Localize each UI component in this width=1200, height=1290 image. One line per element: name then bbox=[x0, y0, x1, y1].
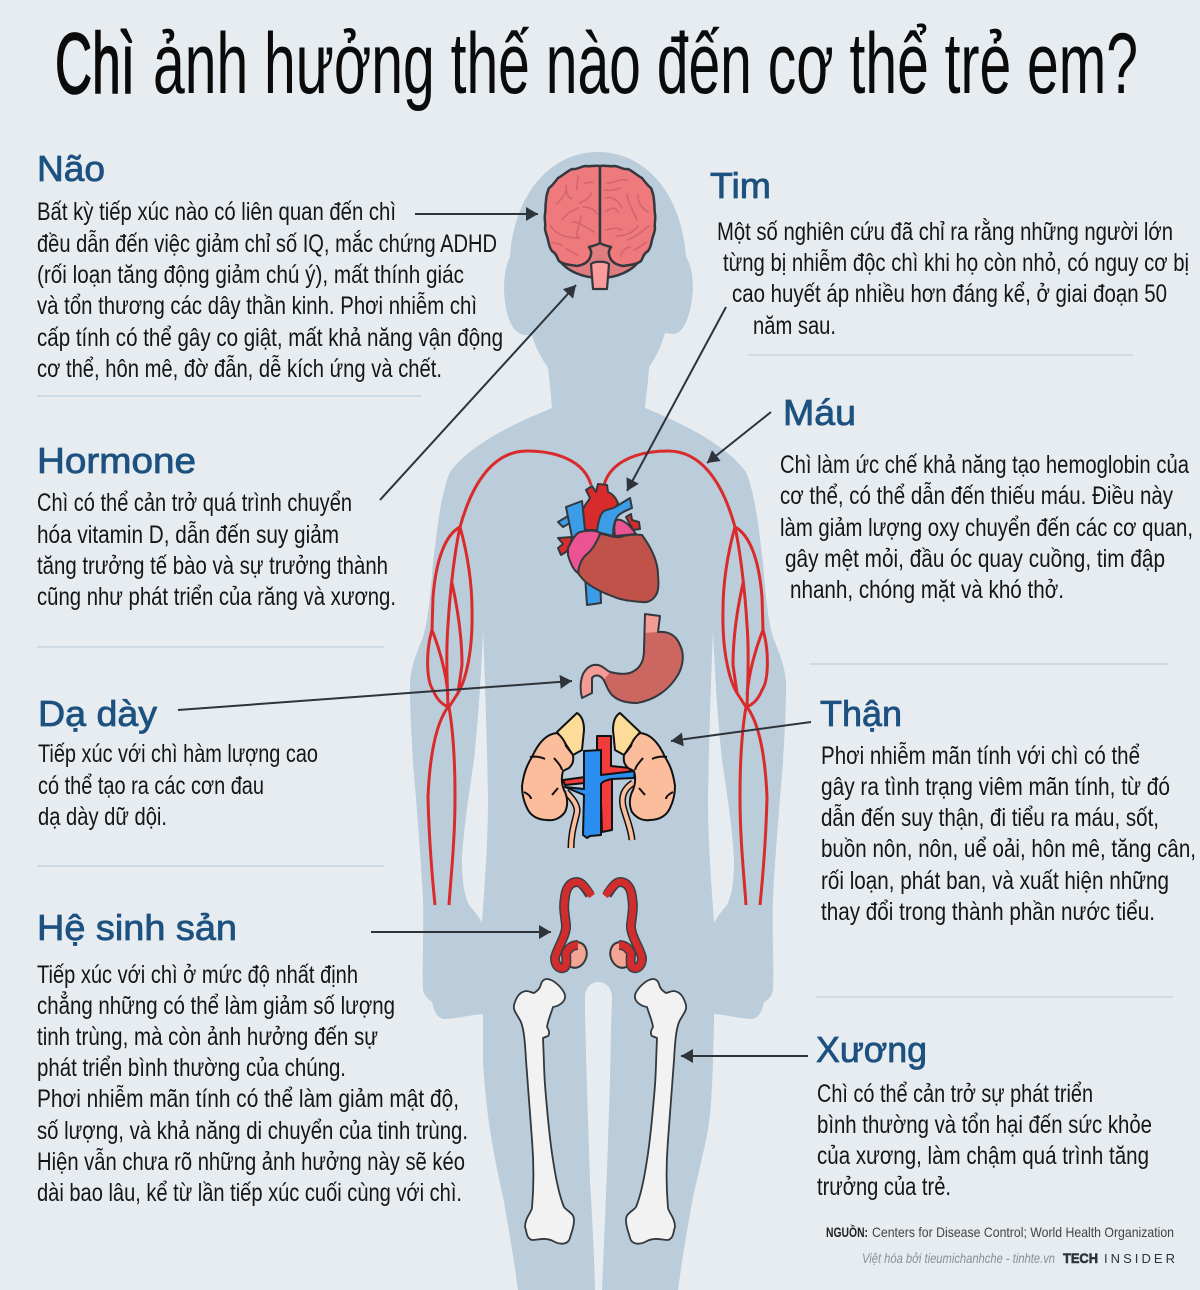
text block: Dạ dày: Tiếp xúc với chì hàm lượng cao bbox=[38, 740, 318, 768]
panel: Tim bbox=[710, 165, 1189, 340]
heading: Xương: Xương bbox=[816, 1029, 927, 1070]
text block: Hormone: tăng trưởng tế bào và sự trưởng thành bbox=[37, 552, 388, 580]
text block: Dạ dày: có thể tạo ra các cơn đau bbox=[38, 772, 264, 800]
heading: Não: Não bbox=[37, 148, 105, 189]
text block: Dạ dày bbox=[38, 740, 318, 831]
arrow: bones bbox=[681, 1055, 808, 1057]
text block: Dạ dày: dạ dày dữ dội. bbox=[38, 803, 167, 831]
heading: Hormone: Hormone bbox=[37, 440, 196, 481]
text block: Hệ sinh sản: Phơi nhiễm mãn tính có thể làm giảm mật độ, bbox=[37, 1084, 459, 1113]
text block: Não: (rối loạn tăng động giảm chú ý), mất thính giác bbox=[37, 261, 464, 289]
icon: stomach bbox=[581, 614, 683, 703]
text block: Hệ sinh sản bbox=[37, 961, 468, 1207]
panel: Thận bbox=[820, 693, 1196, 926]
icon: arteries bbox=[428, 451, 767, 905]
panel: Hormone bbox=[37, 440, 396, 611]
arrow: blood bbox=[707, 412, 771, 463]
text block: Thận bbox=[821, 741, 1196, 926]
icon: reproductive organs bbox=[555, 882, 642, 971]
text block: Hormone: cũng như phát triển của răng và xương. bbox=[37, 583, 396, 611]
panel: Xương bbox=[816, 1029, 1152, 1201]
icon: kidneys bbox=[522, 713, 675, 848]
text block: Hệ sinh sản: dài bao lâu, kể từ lần tiếp xúc cuối cùng với chì. bbox=[37, 1179, 462, 1207]
text block: Tim bbox=[717, 217, 1189, 340]
panel: Não bbox=[37, 148, 503, 383]
text block: Não: Bất kỳ tiếp xúc nào có liên quan đến chì bbox=[37, 198, 396, 226]
panel: Máu bbox=[780, 392, 1193, 604]
text block: Não: cấp tính có thể gây co giật, mất khả năng vận động bbox=[37, 324, 503, 352]
title: Chì bbox=[55, 16, 135, 112]
panel: Dạ dày bbox=[38, 693, 318, 831]
text block: Hệ sinh sản: số lượng, và khả năng di chuyển của tinh trùng. bbox=[37, 1117, 468, 1145]
text block: Não: cơ thể, hôn mê, đờ đẫn, dễ kích ứng và chết. bbox=[37, 354, 442, 383]
text block: Máu: nhanh, chóng mặt và khó thở. bbox=[790, 576, 1064, 604]
heading: Máu: Máu bbox=[783, 392, 856, 433]
arrow: heart bbox=[627, 307, 726, 491]
text block: Hệ sinh sản: tinh trùng, mà còn ảnh hưởng đến sự bbox=[37, 1023, 378, 1051]
text block: Não: và tổn thương các dây thần kinh. Phơi nhiễm chì bbox=[37, 291, 477, 320]
icon: brain bbox=[545, 166, 655, 289]
heading: Hệ sinh sản: Hệ sinh sản bbox=[37, 907, 237, 948]
arrow: brain bbox=[415, 213, 538, 215]
text block: Hệ sinh sản: chẳng những có thể làm giảm số lượng bbox=[37, 990, 395, 1020]
icon: left femur bbox=[514, 979, 574, 1244]
text block: Hệ sinh sản: Tiếp xúc với chì ở mức độ nhất định bbox=[37, 961, 358, 989]
logo: Tech Insider: INSIDER bbox=[1104, 1251, 1175, 1266]
text block: Thận: Phơi nhiễm mãn tính với chì có thể bbox=[821, 741, 1140, 770]
text block: Hormone: Chì có thể cản trở quá trình chuyển bbox=[37, 489, 352, 517]
text block: Hormone: hóa vitamin D, dẫn đến suy giảm bbox=[37, 520, 339, 549]
logo: Tech Insider: TECH bbox=[1063, 1250, 1098, 1266]
text block: Hệ sinh sản: phát triển bình thường của chúng. bbox=[37, 1054, 346, 1082]
text block: Não bbox=[37, 198, 503, 383]
logo: Tech Insider bbox=[1063, 1250, 1175, 1266]
source credit: NGUỒN: bbox=[826, 1223, 868, 1240]
icon: heart bbox=[558, 484, 658, 605]
body silhouette bbox=[410, 152, 786, 1290]
arrow: kidneys bbox=[671, 722, 811, 741]
icon: right femur bbox=[626, 979, 686, 1244]
arrow: reproductive bbox=[371, 931, 551, 933]
heading: Thận: Thận bbox=[820, 693, 902, 734]
heading: Tim: Tim bbox=[710, 165, 771, 206]
text block: Xương: trưởng của trẻ. bbox=[817, 1173, 951, 1201]
text block: Xương bbox=[817, 1080, 1152, 1201]
translation credit: Việt hóa bởi tieumichanhche - tinhte.vn bbox=[862, 1250, 1055, 1266]
text block: Não: đều dẫn đến việc giảm chỉ số IQ, mắc chứng ADHD bbox=[37, 229, 497, 258]
text block: Xương: Chì có thể cản trở sự phát triển bbox=[817, 1080, 1093, 1108]
panel: Hệ sinh sản bbox=[37, 907, 468, 1207]
text block: Máu bbox=[780, 451, 1193, 604]
heading: Dạ dày: Dạ dày bbox=[38, 693, 157, 734]
text block: Hệ sinh sản: Hiện vẫn chưa rõ những ảnh hưởng này sẽ kéo bbox=[37, 1147, 465, 1176]
arrow: hormone bbox=[380, 285, 576, 500]
text block: Hormone bbox=[37, 489, 396, 611]
text block: Tim: năm sau. bbox=[753, 312, 836, 340]
arrow: stomach bbox=[178, 681, 572, 710]
